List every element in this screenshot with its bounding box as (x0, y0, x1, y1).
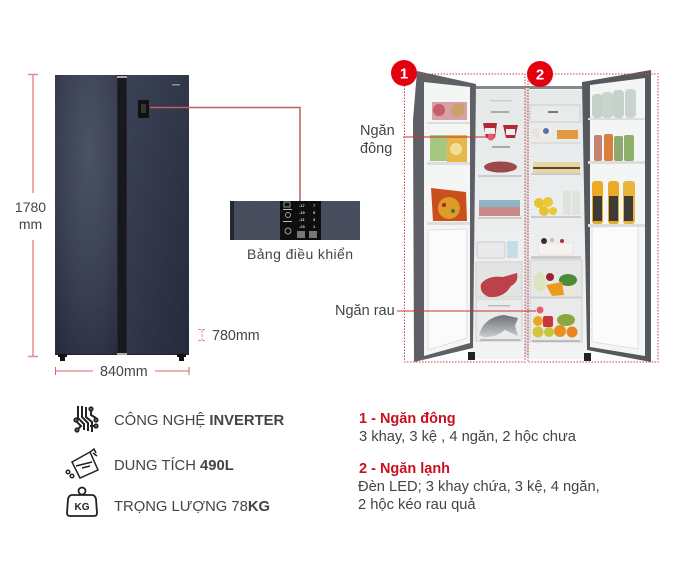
door texture (55, 75, 189, 354)
control panel display: -19 (299, 210, 306, 215)
width dimension (55, 364, 189, 380)
freezer contents (476, 100, 522, 341)
control panel display: 1 (313, 224, 316, 229)
width value: 840mm (100, 364, 148, 380)
icon: weight (67, 488, 97, 516)
right door (582, 70, 651, 362)
left door foot (468, 352, 475, 360)
control panel display: 3 (313, 217, 316, 222)
vegetable drawer label: Ngăn rau (335, 303, 395, 319)
fridge description: 2 hộc kéo rau quả (358, 497, 476, 513)
meat tray (484, 162, 517, 172)
freezer label: Ngăn (360, 123, 395, 139)
vegetable drawer callout (335, 303, 544, 319)
fridge description: Đèn LED; 3 khay chứa, 3 kệ, 4 ngăn, (358, 479, 600, 495)
zone 1 dotted outline (404, 74, 525, 362)
led light box (530, 105, 580, 122)
freezer callout (360, 123, 494, 157)
fridge description (358, 479, 600, 513)
badge 2 (527, 61, 553, 87)
ice trays (477, 242, 505, 258)
water bottles (592, 94, 603, 118)
height dimension: mm (19, 216, 42, 232)
left door (413, 71, 476, 362)
meat drawer (476, 262, 522, 297)
cake (538, 243, 573, 255)
closed refrigerator (55, 75, 189, 361)
jars (532, 128, 542, 138)
milk bottles (563, 191, 571, 215)
freezer callout: đông (360, 141, 392, 157)
right foot (177, 354, 186, 361)
left door (55, 75, 117, 354)
control panel display: 5 (313, 210, 316, 215)
badge 1: 1 (400, 66, 408, 82)
icon: inverter circuit (74, 406, 98, 432)
icon: weight: KG (74, 502, 90, 513)
feature: weight: TRỌNG LƯỢNG 78KG (114, 499, 270, 515)
height value: 1780 (15, 199, 46, 215)
right door (127, 75, 189, 354)
depth dimension (198, 328, 260, 344)
badge 1 (391, 60, 417, 86)
height dimension (15, 74, 46, 356)
freezer description: 3 khay, 3 kệ , 4 ngăn, 2 hộc chưa (359, 429, 577, 445)
center gap (118, 77, 126, 353)
control panel callout line (150, 108, 300, 202)
brand mark (172, 84, 180, 86)
display digits (141, 104, 146, 113)
control panel display: -17 (299, 203, 306, 208)
control panel label: Bảng điều khiển (247, 246, 353, 262)
bacon packs (479, 200, 520, 207)
badge 2: 2 (536, 66, 544, 84)
feature: inverter: CÔNG NGHỆ INVERTER (114, 412, 285, 429)
fridge cabinet (470, 86, 588, 359)
fish drawer (476, 299, 522, 341)
vegetable drawer (530, 260, 582, 297)
fridge contents (530, 105, 582, 342)
sandwich tray (533, 162, 580, 173)
zone 2 dotted outline (528, 74, 658, 362)
left foot (58, 354, 67, 361)
control panel display (280, 201, 321, 240)
orange juice bottles (592, 181, 603, 224)
door display (138, 100, 149, 118)
fruit drawer (530, 298, 582, 342)
ice cream tubs (483, 123, 497, 138)
feature: capacity: DUNG TÍCH 490L (114, 457, 234, 474)
right door foot (584, 353, 591, 361)
control panel display: -23 (299, 224, 306, 229)
open refrigerator (413, 70, 651, 362)
icon: capacity (66, 449, 98, 478)
depth value: 780mm (212, 328, 260, 344)
pizza box (431, 188, 467, 221)
frozen packs (432, 102, 467, 120)
control panel close-up (230, 201, 360, 240)
lemons (534, 198, 544, 208)
juice bottles (594, 135, 602, 161)
fridge heading: 2 - Ngăn lạnh (359, 461, 450, 477)
freezer heading: 1 - Ngăn đông (359, 411, 456, 427)
control panel display: -21 (299, 217, 306, 222)
control panel display: 7 (313, 203, 316, 208)
